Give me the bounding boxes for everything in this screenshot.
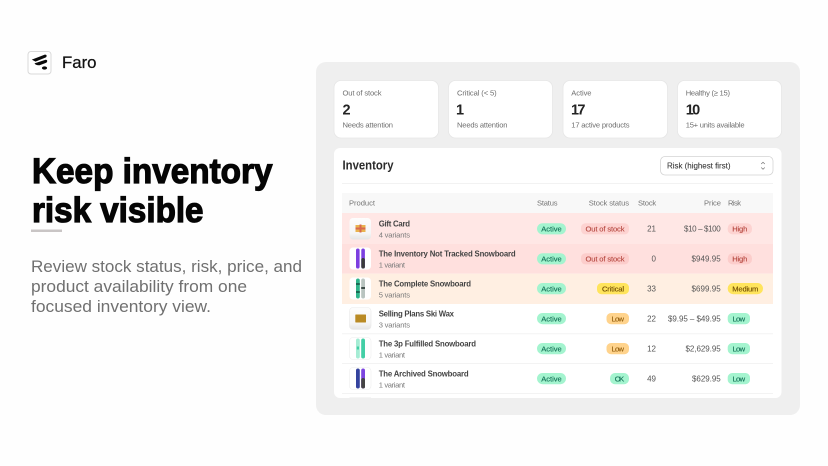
row: The 3p Fulfilled Snowboard: Low	[611, 344, 624, 354]
subtitle	[31, 257, 302, 316]
row: The 3p Fulfilled Snowboard: Active	[541, 344, 562, 354]
row: The Inventory Not Tracked Snowboard: 0	[652, 255, 657, 264]
row: Selling Plans Ski Wax: 3 variants	[379, 320, 410, 329]
row: The Archived Snowboard: OK	[615, 374, 624, 384]
table header row: Stock status	[589, 198, 629, 208]
panel: inventory table	[334, 148, 782, 398]
stat card: critical	[448, 80, 552, 138]
heading: Inventory: Inventory	[342, 158, 394, 172]
brand name: Faro	[62, 54, 96, 72]
title	[32, 152, 273, 230]
row: The Archived Snowboard: 1 variant	[379, 380, 406, 389]
row: The Complete Snowboard: Critical	[602, 284, 624, 294]
thumbnail: blue and purple snowboard	[350, 368, 371, 390]
row: The Inventory Not Tracked Snowboard: 1 variant	[379, 260, 406, 270]
row: Gift Card: Active	[541, 225, 562, 234]
table header row: Risk	[728, 198, 741, 208]
thumbnail: green snowboard	[350, 278, 371, 300]
sort select	[660, 156, 773, 175]
row: The 3p Fulfilled Snowboard	[342, 338, 773, 364]
row: The Archived Snowboard: $629.95	[692, 374, 721, 384]
stat card: active: 17	[571, 102, 586, 118]
accent rule	[31, 230, 62, 232]
stat card: critical: Critical (< 5)	[457, 88, 497, 98]
row: The Inventory Not Tracked Snowboard: Out of stock	[586, 255, 625, 264]
row: Selling Plans Ski Wax: Selling Plans Ski Wax	[379, 309, 455, 318]
row: The Archived Snowboard: 49	[647, 374, 657, 384]
row: Selling Plans Ski Wax: 22	[647, 314, 657, 324]
row: The Archived Snowboard: The Archived Snowboard	[379, 369, 469, 378]
icon: select chevrons	[761, 162, 765, 169]
row: The Complete Snowboard: 33	[647, 284, 657, 294]
row: The Complete Snowboard: $699.95	[692, 284, 721, 294]
stat card: healthy: 10	[686, 102, 700, 118]
stat card: out of stock: Needs attention	[342, 120, 393, 130]
row: The 3p Fulfilled Snowboard: Low	[733, 344, 746, 354]
row: The Inventory Not Tracked Snowboard	[342, 244, 773, 274]
subtitle: Review stock status, risk, price, and	[31, 257, 302, 276]
thumbnail: gift card	[350, 218, 371, 240]
table header row	[342, 193, 773, 213]
row: The Inventory Not Tracked Snowboard: $949.95	[692, 255, 721, 264]
row: Selling Plans Ski Wax	[342, 308, 773, 334]
stat card: active	[563, 80, 668, 138]
stat card: out of stock: Out of stock	[342, 88, 382, 98]
thumbnail: ski wax	[350, 308, 371, 330]
stat card: active: Active	[571, 88, 592, 98]
row: The 3p Fulfilled Snowboard: The 3p Fulfilled Snowboard	[379, 339, 476, 348]
row: The Archived Snowboard: Active	[541, 374, 562, 384]
title: risk visible	[32, 191, 204, 230]
stat card: active: 17 active products	[571, 120, 630, 130]
title: Keep inventory	[32, 152, 273, 191]
row: Selling Plans Ski Wax: Low	[611, 314, 624, 324]
row: The Inventory Not Tracked Snowboard: The Inventory Not Tracked Snowboard	[379, 250, 516, 258]
row: Selling Plans Ski Wax: Active	[541, 314, 562, 324]
row: The Complete Snowboard: The Complete Snowboard	[379, 280, 471, 288]
stat card: out of stock: 2	[342, 102, 351, 118]
thumbnail: purple snowboard	[350, 248, 371, 270]
row: The 3p Fulfilled Snowboard: 12	[647, 344, 657, 354]
icon: Faro mark	[28, 52, 51, 74]
table header row: Product	[349, 198, 376, 208]
row: The 3p Fulfilled Snowboard: 1 variant	[379, 350, 406, 359]
table header row: Price	[704, 198, 721, 208]
panel: dashboard	[316, 62, 800, 415]
row: The Complete Snowboard: Medium	[732, 284, 758, 294]
row: Gift Card: Out of stock	[586, 225, 625, 234]
row: Gift Card: 4 variants	[379, 230, 410, 240]
subtitle: focused inventory view.	[31, 297, 211, 316]
thumbnail: teal snowboard	[350, 338, 371, 360]
row: Selling Plans Ski Wax: $9.95 – $49.95	[668, 314, 721, 324]
stat card: critical: 1	[456, 102, 464, 118]
row: Gift Card	[342, 213, 773, 244]
row: The 3p Fulfilled Snowboard: $2,629.95	[686, 344, 721, 354]
row: The Inventory Not Tracked Snowboard: Active	[541, 255, 562, 264]
row: The Complete Snowboard	[342, 274, 773, 304]
row: Gift Card: 21	[647, 225, 657, 234]
stat card: out of stock	[334, 80, 438, 138]
stat card: healthy: 15+ units available	[686, 120, 745, 130]
row: The Archived Snowboard: Low	[733, 374, 746, 384]
stat card: critical: Needs attention	[457, 120, 508, 130]
row: Gift Card: Gift Card	[379, 220, 410, 228]
sort select: Risk (highest first)	[667, 162, 731, 170]
table header row: Status	[537, 198, 558, 208]
stat card: healthy: Healthy (≥ 15)	[686, 88, 730, 98]
subtitle: product availability from one	[31, 277, 247, 296]
row: The Complete Snowboard: Active	[541, 284, 562, 294]
row: Selling Plans Ski Wax: Low	[733, 314, 746, 324]
row: The Archived Snowboard	[342, 368, 773, 394]
stat card: healthy	[678, 80, 782, 138]
row: The Inventory Not Tracked Snowboard: High	[732, 255, 747, 264]
brand logo	[28, 52, 96, 74]
row: Gift Card: High	[732, 225, 747, 234]
row: Gift Card: $10 – $100	[684, 225, 721, 234]
row: The Complete Snowboard: 5 variants	[379, 290, 410, 300]
table header row: Stock	[638, 198, 656, 208]
